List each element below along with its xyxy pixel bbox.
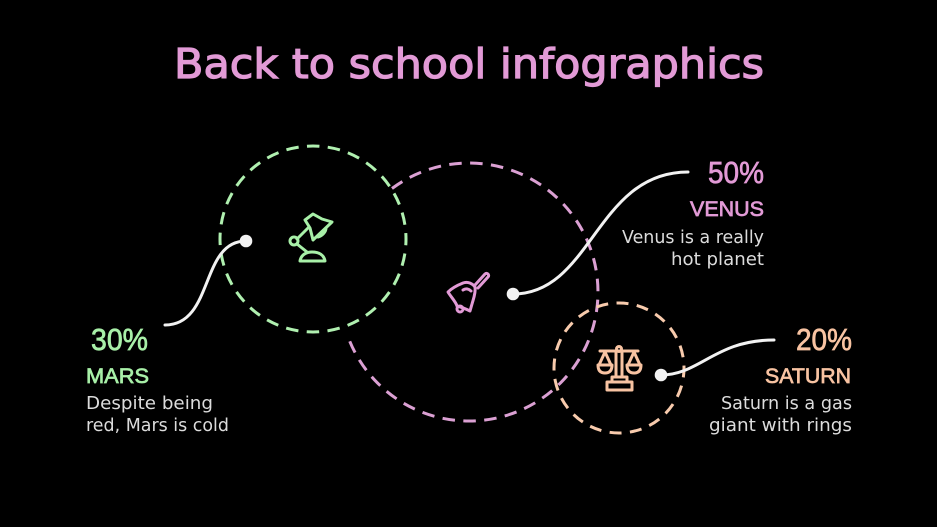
label block: Venus <box>622 155 764 270</box>
dashed circle: Mars <box>220 146 406 332</box>
label block: Mars: Despite being <box>86 394 213 414</box>
icon: scales <box>598 346 641 390</box>
label block: Saturn <box>709 322 852 436</box>
label block: Mars: 30% <box>91 322 148 357</box>
connector: Venus <box>507 172 688 300</box>
label block: Mars <box>86 322 229 436</box>
label block: Saturn: Saturn is a gas <box>721 394 852 414</box>
dashed circle: Saturn <box>554 303 684 433</box>
label block: Venus: Venus is a really <box>622 228 764 248</box>
icon: desk lamp <box>290 214 332 261</box>
label block: Venus: VENUS <box>690 198 764 221</box>
icon: bell <box>448 273 489 312</box>
label block: Saturn: 20% <box>796 322 852 357</box>
title: Back to school infographics <box>174 40 764 88</box>
label block: Saturn: giant with rings <box>709 416 852 436</box>
label block: Saturn: SATURN <box>765 365 851 388</box>
label block: Mars: MARS <box>86 365 149 388</box>
label block: Venus: 50% <box>708 155 764 190</box>
dashed circle: Venus <box>347 163 598 421</box>
label block: Venus: hot planet <box>671 250 764 270</box>
connector: Saturn <box>655 340 774 381</box>
connector: Mars <box>165 235 252 325</box>
label block: Mars: red, Mars is cold <box>86 416 229 436</box>
